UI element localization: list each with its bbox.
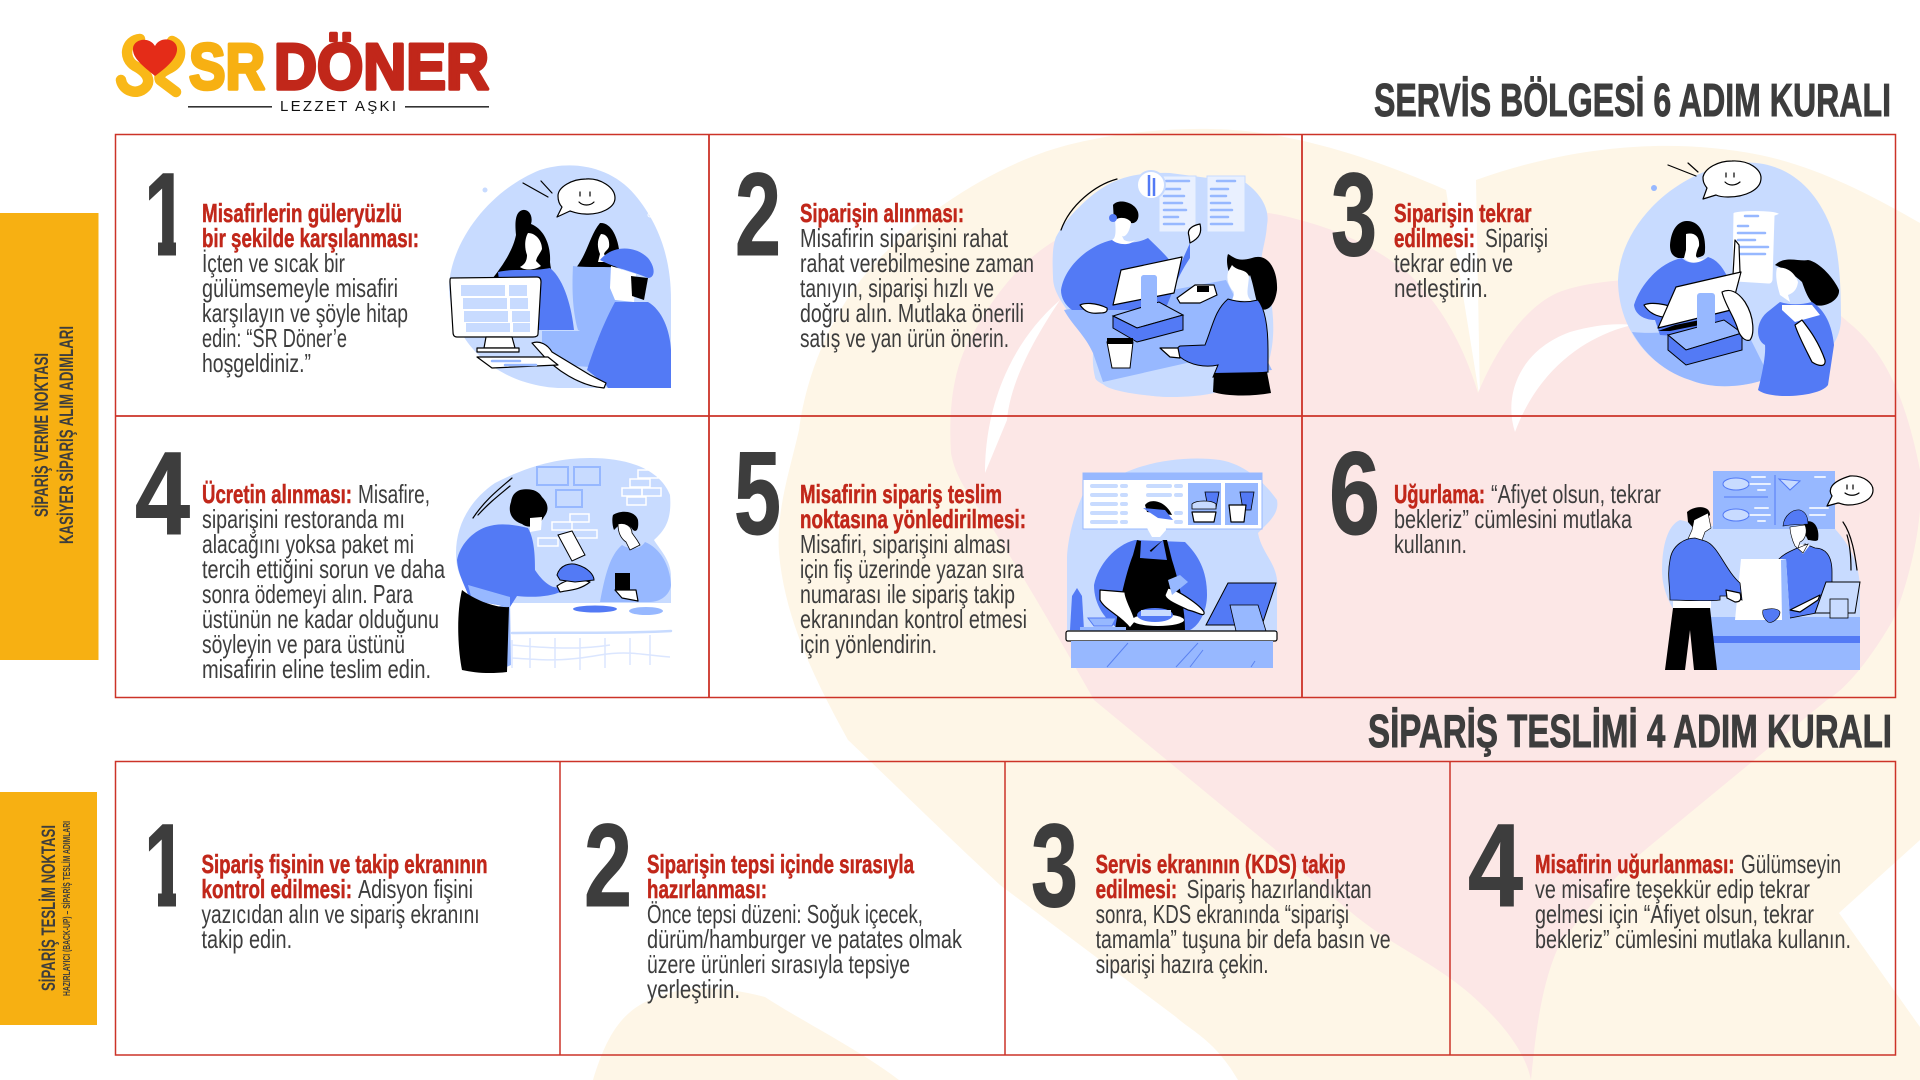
delivery step 2 body text [647, 899, 963, 1004]
side tab: sipariş verme noktası: KASİYER SİPARİŞ ALIM ADIMLARI [57, 326, 78, 544]
logo wordmark SR: SR [189, 30, 265, 103]
step 2 body text: doğru alın. Mutlaka önerili [800, 298, 1024, 328]
step 4 heading: Ücretin alınması: [202, 479, 352, 509]
illustration: greeting guests [449, 165, 671, 388]
side tab: sipariş teslim noktası: SİPARİŞ TESLİM NOKTASI [39, 825, 60, 991]
step 1 body text: hoşgeldiniz.” [202, 348, 311, 378]
step 3 body text: tekrar edin ve [1394, 248, 1513, 278]
background: brand heart watermark [593, 129, 1920, 1080]
step 1 body text: gülümsemeyle misafiri [202, 273, 398, 303]
delivery step 3 heading [1096, 849, 1346, 904]
panel: delivery step 2 [584, 800, 963, 1004]
number 6: 6 [1329, 428, 1380, 560]
number 1: 1 [144, 149, 188, 281]
delivery step 4 body text: gelmesi için “Afiyet olsun, tekrar [1535, 899, 1814, 929]
delivery step 3 heading: edilmesi: [1096, 874, 1177, 904]
panel: step 1 [144, 149, 671, 388]
step 5 body text: numarası ile sipariş takip [800, 579, 1015, 609]
step 5 body text: Misafiri, siparişini alması [800, 529, 1011, 559]
number 2: 2 [735, 149, 781, 281]
illustration: seeing the guest off [1662, 471, 1873, 670]
delivery step 1 body text [202, 874, 480, 954]
step 5 body text: için yönlendirin. [800, 629, 937, 659]
number 4: 4 [135, 428, 190, 560]
delivery step 1 body text: yazıcıdan alın ve sipariş ekranını [202, 899, 480, 929]
delivery step 1 heading: Sipariş fişinin ve takip ekranının [202, 849, 488, 879]
step 4 body text: alacağını yoksa paket mi [202, 529, 414, 559]
step 2 body text: satış ve yan ürün önerin. [800, 323, 1009, 353]
delivery step 2 body text: yerleştirin. [647, 974, 740, 1004]
delivery step 3 body text: tamamla” tuşuna bir defa basın ve [1096, 924, 1391, 954]
step 1 body text: karşılayın ve şöyle hitap [202, 298, 408, 328]
delivery step 3 body text: Sipariş hazırlandıktan [1187, 874, 1372, 904]
panel: step 6 [1329, 428, 1873, 670]
step 5 heading [800, 479, 1026, 534]
step 6 body text [1394, 479, 1661, 559]
step 4 body text: tercih ettiğini sorun ve daha [202, 554, 445, 584]
panel: delivery step 1 [148, 824, 487, 954]
step 5 heading: Misafirin sipariş teslim [800, 479, 1002, 509]
step 1 heading: Misafirlerin güleryüzlü [202, 198, 402, 228]
illustration: taking payment [456, 458, 671, 673]
logo: SR Döner [121, 30, 489, 115]
delivery step 4 body text: Gülümseyin [1741, 849, 1841, 879]
step 1 body text: edin: “SR Döner’e [202, 323, 347, 353]
step 3 body text: Siparişi [1485, 223, 1548, 253]
step 1 heading [202, 198, 419, 253]
delivery step 2 body text: Önce tepsi düzeni: Soğuk içecek, [647, 899, 923, 929]
grid: four step table [116, 762, 1896, 1055]
delivery step 3 heading: Servis ekranının (KDS) takip [1096, 849, 1346, 879]
panel: step 5 [734, 428, 1277, 668]
number 1: 1 [144, 800, 187, 932]
step 2 body text: tanıyın, siparişi hızlı ve [800, 273, 994, 303]
step 3 heading: Siparişin tekrar [1394, 198, 1532, 228]
step 2 heading: Siparişin alınması: [800, 198, 964, 228]
delivery step 1 heading [202, 849, 488, 904]
step 2 body text: Misafirin siparişini rahat [800, 223, 1009, 253]
side tab: sipariş verme noktası: SİPARİŞ VERME NOKTASI [32, 353, 53, 517]
logo tagline: LEZZET AŞKI [280, 98, 396, 115]
step 4 body text: söyleyin ve para üstünü [202, 629, 405, 659]
step 3 body text: netleştirin. [1394, 273, 1488, 303]
step 2 body text [800, 223, 1034, 353]
delivery step 2 heading [647, 849, 914, 904]
delivery step 1 heading: kontrol edilmesi: [202, 874, 352, 904]
panel: delivery step 4 [1468, 800, 1851, 954]
step 4 body text: üstünün ne kadar olduğunu [202, 604, 439, 634]
delivery step 4 body text [1535, 849, 1851, 954]
delivery step 3 body text: sonra, KDS ekranında “siparişi [1096, 899, 1349, 929]
delivery step 3 body text: siparişi hazıra çekin. [1096, 949, 1269, 979]
step 6 body text: “Afiyet olsun, tekrar [1491, 479, 1661, 509]
side tab: sipariş teslim noktası [0, 792, 97, 1025]
step 5 heading: noktasına yönledirilmesi: [800, 504, 1026, 534]
step 4 body text: Misafire, [358, 479, 430, 509]
number 3: 3 [1031, 800, 1078, 932]
delivery step 3 body text [1096, 874, 1391, 979]
step 4 body text: siparişini restoranda mı [202, 504, 405, 534]
illustration: directing to pick-up [1066, 459, 1277, 668]
number 4: 4 [1468, 800, 1523, 932]
panel: step 2 [735, 149, 1277, 397]
illustration: repeating the order [1618, 161, 1841, 396]
delivery step 2 heading: Siparişin tepsi içinde sırasıyla [647, 849, 914, 879]
step 1 body text: İçten ve sıcak bir [202, 248, 345, 278]
grid: six step table [115, 134, 1896, 698]
step 2 body text: rahat verebilmesine zaman [800, 248, 1034, 278]
step 6 body text: kullanın. [1394, 529, 1467, 559]
panel: step 3 [1331, 149, 1841, 396]
delivery step 2 body text: dürüm/hamburger ve patates olmak [647, 924, 963, 954]
step 3 heading: edilmesi: [1394, 223, 1475, 253]
step 4 body text: misafirin eline teslim edin. [202, 654, 431, 684]
logo wordmark DÖNER: DÖNER [274, 30, 489, 103]
step 5 body text [800, 529, 1027, 659]
step 1 body text [202, 248, 408, 378]
step 4 body text [202, 479, 445, 684]
step 1 heading: bir şekilde karşılanması: [202, 223, 419, 253]
delivery step 1 body text: Adisyon fişini [358, 874, 473, 904]
step 6 body text: bekleriz” cümlesini mutlaka [1394, 504, 1632, 534]
panel: step 4 [135, 428, 671, 684]
illustration: taking the order [1053, 171, 1277, 397]
step 5 body text: ekranından kontrol etmesi [800, 604, 1027, 634]
step 3 body text [1394, 223, 1548, 303]
number 5: 5 [734, 428, 781, 560]
delivery step 2 heading: hazırlanması: [647, 874, 767, 904]
number 2: 2 [584, 800, 632, 932]
panel: delivery step 3 [1031, 800, 1391, 979]
side tab: sipariş verme noktası [0, 213, 98, 660]
delivery step 2 body text: üzere ürünleri sırasıyla tepsiye [647, 949, 910, 979]
number 3: 3 [1331, 149, 1377, 281]
step 6 heading: Uğurlama: [1394, 479, 1485, 509]
step 4 body text: sonra ödemeyi alın. Para [202, 579, 413, 609]
delivery step 1 body text: takip edin. [202, 924, 292, 954]
delivery step 4 heading: Misafirin uğurlanması: [1535, 849, 1734, 879]
step 3 heading [1394, 198, 1532, 253]
side tab: sipariş teslim noktası: HAZIRLAYICI (BACK-UP) – SİPARİŞ TESLİM ADIMLARI [60, 821, 73, 996]
delivery step 4 body text: ve misafire teşekkür edip tekrar [1535, 874, 1810, 904]
logo ribbon mark [121, 39, 180, 92]
step 5 body text: için fiş üzerinde yazan sıra [800, 554, 1024, 584]
